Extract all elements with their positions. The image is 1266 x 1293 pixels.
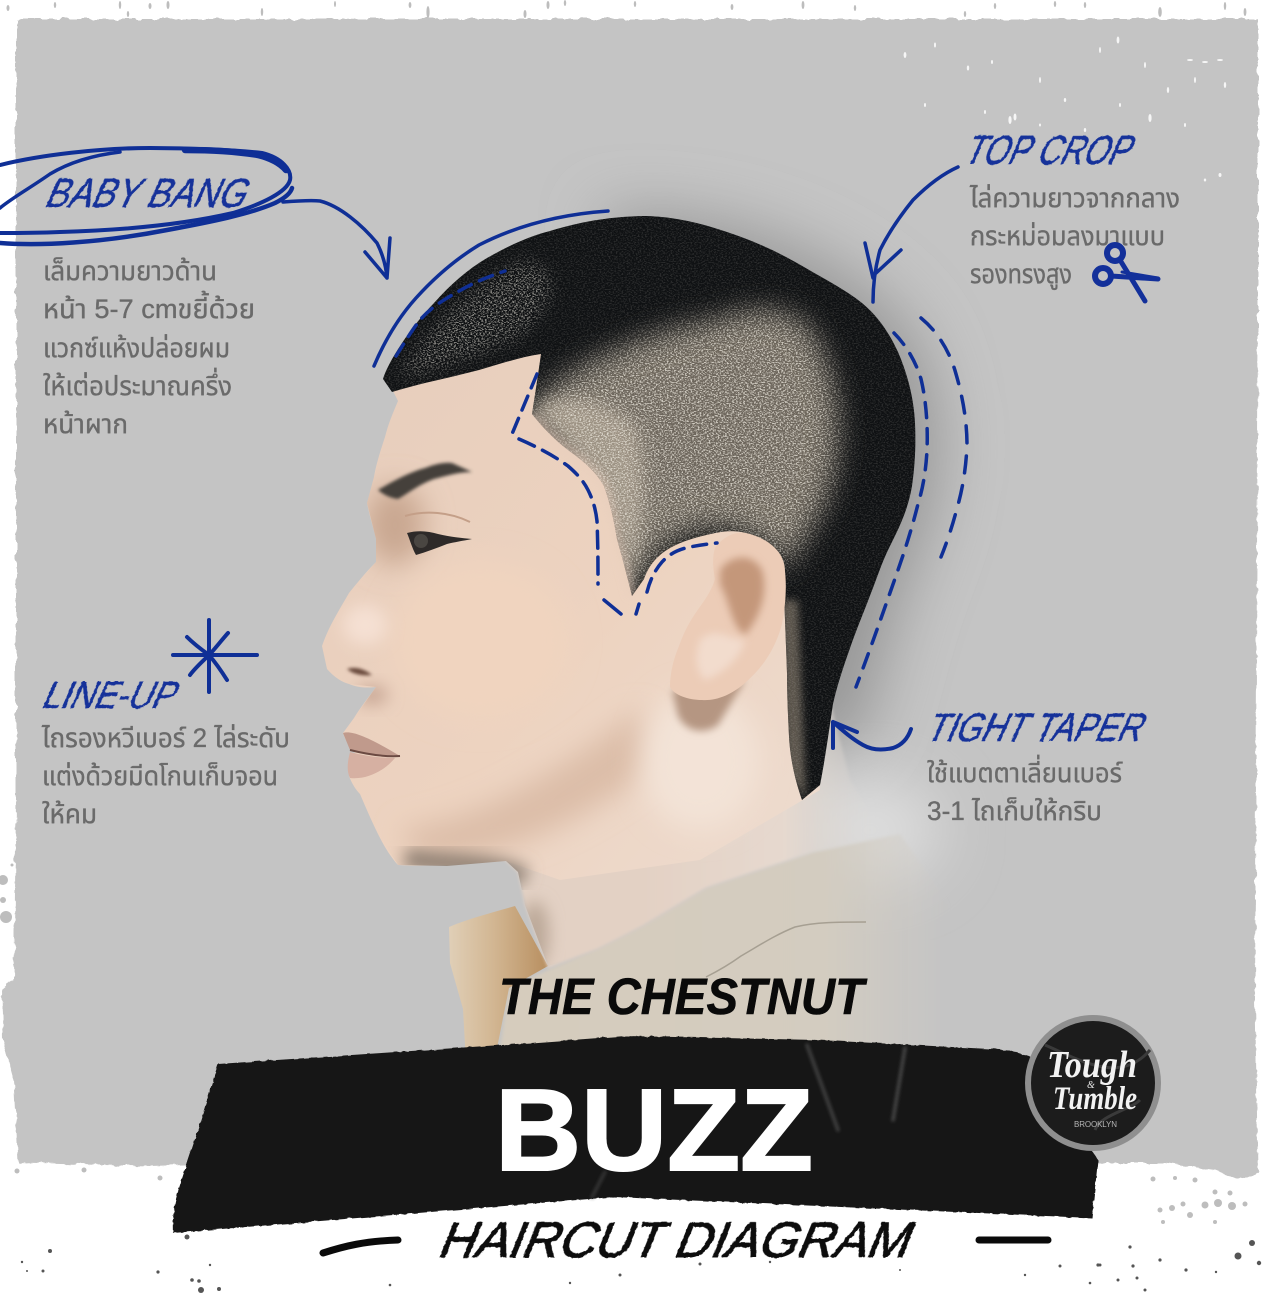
decorative bar: left of subtitle — [323, 1240, 398, 1253]
text: line-up description: แต่งด้วยมีดโกนเก็บจอน — [42, 761, 278, 791]
icon: scissors — [1095, 245, 1158, 301]
text: top crop description — [969, 183, 1180, 290]
annotation: baby bang scribble circle and arrow — [0, 148, 390, 278]
heading: buzz: BUZZ — [495, 1065, 813, 1195]
text: baby bang description — [43, 256, 255, 439]
heading: tight taper: TIGHT TAPER — [920, 705, 1155, 750]
tape creases — [592, 1045, 905, 1197]
shirt seam — [706, 922, 866, 977]
face — [322, 320, 820, 880]
text: baby bang description: ให้เต่อประมาณครึ่ง — [43, 367, 232, 401]
facial shading — [343, 485, 760, 969]
text: baby bang description: เล็มความยาวด้าน — [43, 256, 217, 286]
nose nostril — [347, 668, 372, 675]
panel: black torn tape banner — [173, 1036, 1098, 1233]
icon: tough and tumble logo badge: Tough — [1047, 1044, 1137, 1086]
annotation: fringe arc and dashes — [374, 211, 608, 366]
text: tight taper description: ใช้แบตตาเลี่ยนเบอร์ — [927, 754, 1123, 788]
lips — [343, 732, 400, 778]
text: line-up description: ให้คม — [42, 799, 97, 829]
text: top crop description: รองทรงสูง — [970, 259, 1072, 290]
decorative bar: right of subtitle — [979, 1236, 1048, 1244]
hairline: soft fade into temple skin — [532, 414, 632, 596]
icon: tough and tumble logo badge: BROOKLYN — [1074, 1120, 1117, 1129]
text: top crop description: กระหม่อมลงมาแบบ — [970, 221, 1165, 251]
ear — [670, 533, 786, 731]
head shadow on backdrop — [600, 214, 940, 880]
annotation: tight taper arrow — [833, 722, 911, 749]
text: baby bang description: แวกซ์แห้งปล่อยผม — [43, 333, 230, 363]
hair: dark buzz cut — [383, 216, 915, 800]
text: baby bang description: หน้า 5-7 cmขยี้ด้วย — [43, 290, 255, 324]
hair: faded side and fringe texture — [383, 216, 923, 806]
heading: haircut diagram: HAIRCUT DIAGRAM — [431, 1213, 924, 1269]
text: top crop description: ไล่ความยาวจากกลาง — [969, 183, 1180, 213]
annotation: temple line-up dashes — [512, 374, 717, 614]
text: tight taper description: 3-1 ไถเก็บให้กริบ — [927, 796, 1102, 826]
shirt body — [497, 834, 1000, 1070]
heading: line-up: LINE-UP — [36, 675, 187, 717]
arrow to fringe — [283, 201, 390, 278]
heading: top crop: TOP CROP — [958, 128, 1143, 174]
text: line-up description — [41, 723, 290, 829]
eyebrow — [378, 463, 472, 499]
icon: tough and tumble logo badge — [1028, 1018, 1158, 1148]
neck — [500, 700, 885, 968]
heading: baby bang: BABY BANG — [39, 171, 259, 217]
speckles: grey flecks on white top band — [6, 0, 1246, 18]
annotation: top crop arrow — [865, 167, 958, 302]
annotation: back of head dashes — [856, 318, 967, 687]
text: baby bang description: หน้าผาก — [43, 409, 128, 439]
shirt collar — [449, 906, 548, 1063]
eye — [405, 513, 472, 555]
speckles: white flecks on grey — [904, 36, 1226, 182]
icon: sparkle star — [173, 620, 257, 692]
text: tight taper description — [927, 754, 1123, 826]
icon: tough and tumble logo badge: Tumble — [1053, 1081, 1137, 1117]
text: line-up description: ไถรองหวีเบอร์ 2 ไล่ระดับ — [41, 723, 290, 753]
icon: tough and tumble logo badge: & — [1087, 1080, 1095, 1091]
heading: the chestnut: THE CHESTNUT — [499, 968, 868, 1025]
portrait: man in profile with buzz haircut — [322, 216, 916, 1048]
speckles: black ink dots along bottom — [21, 1234, 1261, 1293]
speckles: grey splatter near torn bottom and left edges — [0, 864, 1248, 1224]
